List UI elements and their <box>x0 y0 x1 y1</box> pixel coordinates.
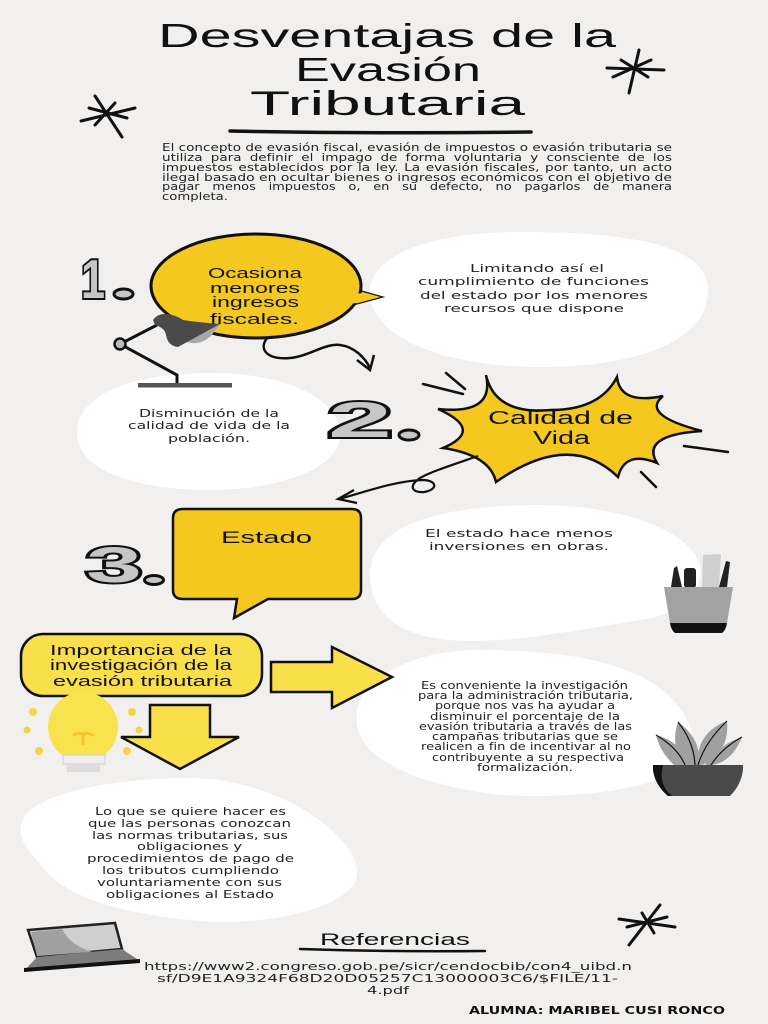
number 3 <box>86 537 164 593</box>
panel: white blob investigacion: campañas tributarias que se <box>432 731 618 743</box>
starburst: Vida <box>533 428 592 448</box>
panel: white blob investigacion <box>357 650 693 796</box>
icon: pencil cup <box>664 554 733 633</box>
intro text block: pagar menos impuestos o, en su defecto, no pagarlos de manera <box>162 181 672 193</box>
intro text block <box>162 142 672 203</box>
panel: white blob investigacion: Es conveniente la investigación <box>421 680 628 692</box>
bubble text: ingresos <box>212 294 299 311</box>
author: ALUMNA: MARIBEL CUSI RONCO <box>469 1004 725 1017</box>
panel: white blob conocer normas: las normas tributarias, sus <box>92 830 288 842</box>
panel: white blob investigacion: porque nos vas ha ayudar a <box>435 700 615 712</box>
panel: white blob limitando <box>370 232 708 367</box>
number 2: 2 <box>328 392 392 448</box>
references: https://www2.congreso.gob.pe/sicr/cendocbib/con4_uibd.n <box>144 961 632 973</box>
number 1: 1 <box>81 248 105 310</box>
number 3: 3 <box>86 537 142 593</box>
panel: white blob conocer normas: procedimientos de pago de <box>87 853 294 865</box>
icon: desk lamp <box>114 314 232 388</box>
panel: white blob limitando: del estado por los menores <box>420 290 648 302</box>
bubble text: fiscales. <box>210 311 299 328</box>
number 1 <box>81 248 133 310</box>
box: importancia: evasión tributaria <box>53 673 233 690</box>
panel: white blob conocer normas <box>20 778 357 922</box>
panel: white blob investigacion: disminuir el porcentaje de la <box>430 711 620 723</box>
title <box>158 17 617 133</box>
panel: white blob limitando: cumplimiento de funciones <box>418 276 649 288</box>
panel: white blob conocer normas: obligaciones al Estado <box>106 889 274 901</box>
icon: star bottom right <box>619 905 675 945</box>
intro text block: ilegal basado en ocultar bienes o ingresos económicos con el objetivo de <box>162 172 672 184</box>
starburst: Calidad de <box>488 408 633 428</box>
panel: white blob investigacion: evasión tributaria a través de las <box>419 721 632 733</box>
yellow speech bubble <box>151 234 383 338</box>
arrow: down <box>121 705 239 769</box>
panel: white blob disminucion: calidad de vida de la <box>128 420 290 432</box>
panel: white blob limitando: Limitando así el <box>470 263 604 275</box>
burst tick marks <box>423 373 728 487</box>
panel: white blob conocer normas: que las personas conozcan <box>88 818 291 830</box>
callout: Estado <box>173 509 361 618</box>
panel: white blob conocer normas: Lo que se quiere hacer es <box>95 806 286 818</box>
intro text block: impuestos establecidos por la ley. La evasión fiscales, por tanto, un acto <box>162 162 672 174</box>
panel: white blob limitando: recursos que dispone <box>444 303 624 315</box>
arrow: right <box>271 647 392 708</box>
references: Referencias <box>320 930 470 949</box>
panel: white blob disminucion: población. <box>168 433 250 445</box>
starburst <box>438 375 702 482</box>
icon: star left <box>81 96 135 137</box>
arrow: curved to step 2 <box>264 338 374 370</box>
panel: white blob investigacion: para la administración tributaria, <box>418 690 633 702</box>
arrow: curved to step 3 <box>338 456 478 503</box>
panel: white blob conocer normas: los tributos cumpliendo <box>102 865 279 877</box>
box: importancia: Importancia de la <box>50 642 233 659</box>
icon: light bulb <box>24 692 142 772</box>
bubble text: Ocasiona <box>208 265 303 282</box>
panel: white blob conocer normas: voluntariamente con sus <box>97 877 282 889</box>
title: Tributaria <box>250 85 525 123</box>
panel: white blob conocer normas: obligaciones y <box>137 841 242 853</box>
references: 4.pdf <box>367 985 409 997</box>
references <box>144 930 632 997</box>
icon: laptop <box>24 923 140 972</box>
panel: white blob disminucion: Disminución de la <box>139 408 279 420</box>
panel: white blob investigacion: contribuyente a su respectiva <box>432 752 624 764</box>
intro text block: completa. <box>162 191 228 203</box>
references: sf/D9E1A9324F68D20D05257C13000003C6/$FILE/11- <box>157 973 618 985</box>
title: Desventajas de la <box>158 17 617 54</box>
box: importancia <box>21 634 262 696</box>
bubble text: menores <box>210 280 300 297</box>
panel: white blob inversiones: El estado hace menos <box>425 528 613 540</box>
bubble text <box>208 265 303 328</box>
icon: star top right <box>607 50 664 93</box>
callout: Estado: Estado <box>221 528 312 547</box>
panel: white blob investigacion: formalización. <box>477 762 573 774</box>
number 2 <box>328 392 419 448</box>
panel: white blob inversiones <box>370 505 701 641</box>
panel: white blob investigacion: realicen a fin de incentivar al no <box>421 741 631 753</box>
title: Evasión <box>295 51 481 88</box>
box: importancia: investigación de la <box>50 657 233 674</box>
intro text block: utiliza para definir el impago de forma voluntaria y consciente de los <box>162 152 672 164</box>
intro text block: El concepto de evasión fiscal, evasión de impuestos o evasión tributaria se <box>162 142 672 154</box>
panel: white blob inversiones: inversiones en obras. <box>429 541 609 553</box>
panel: white blob disminucion <box>77 373 340 490</box>
icon: potted plant <box>653 721 743 796</box>
